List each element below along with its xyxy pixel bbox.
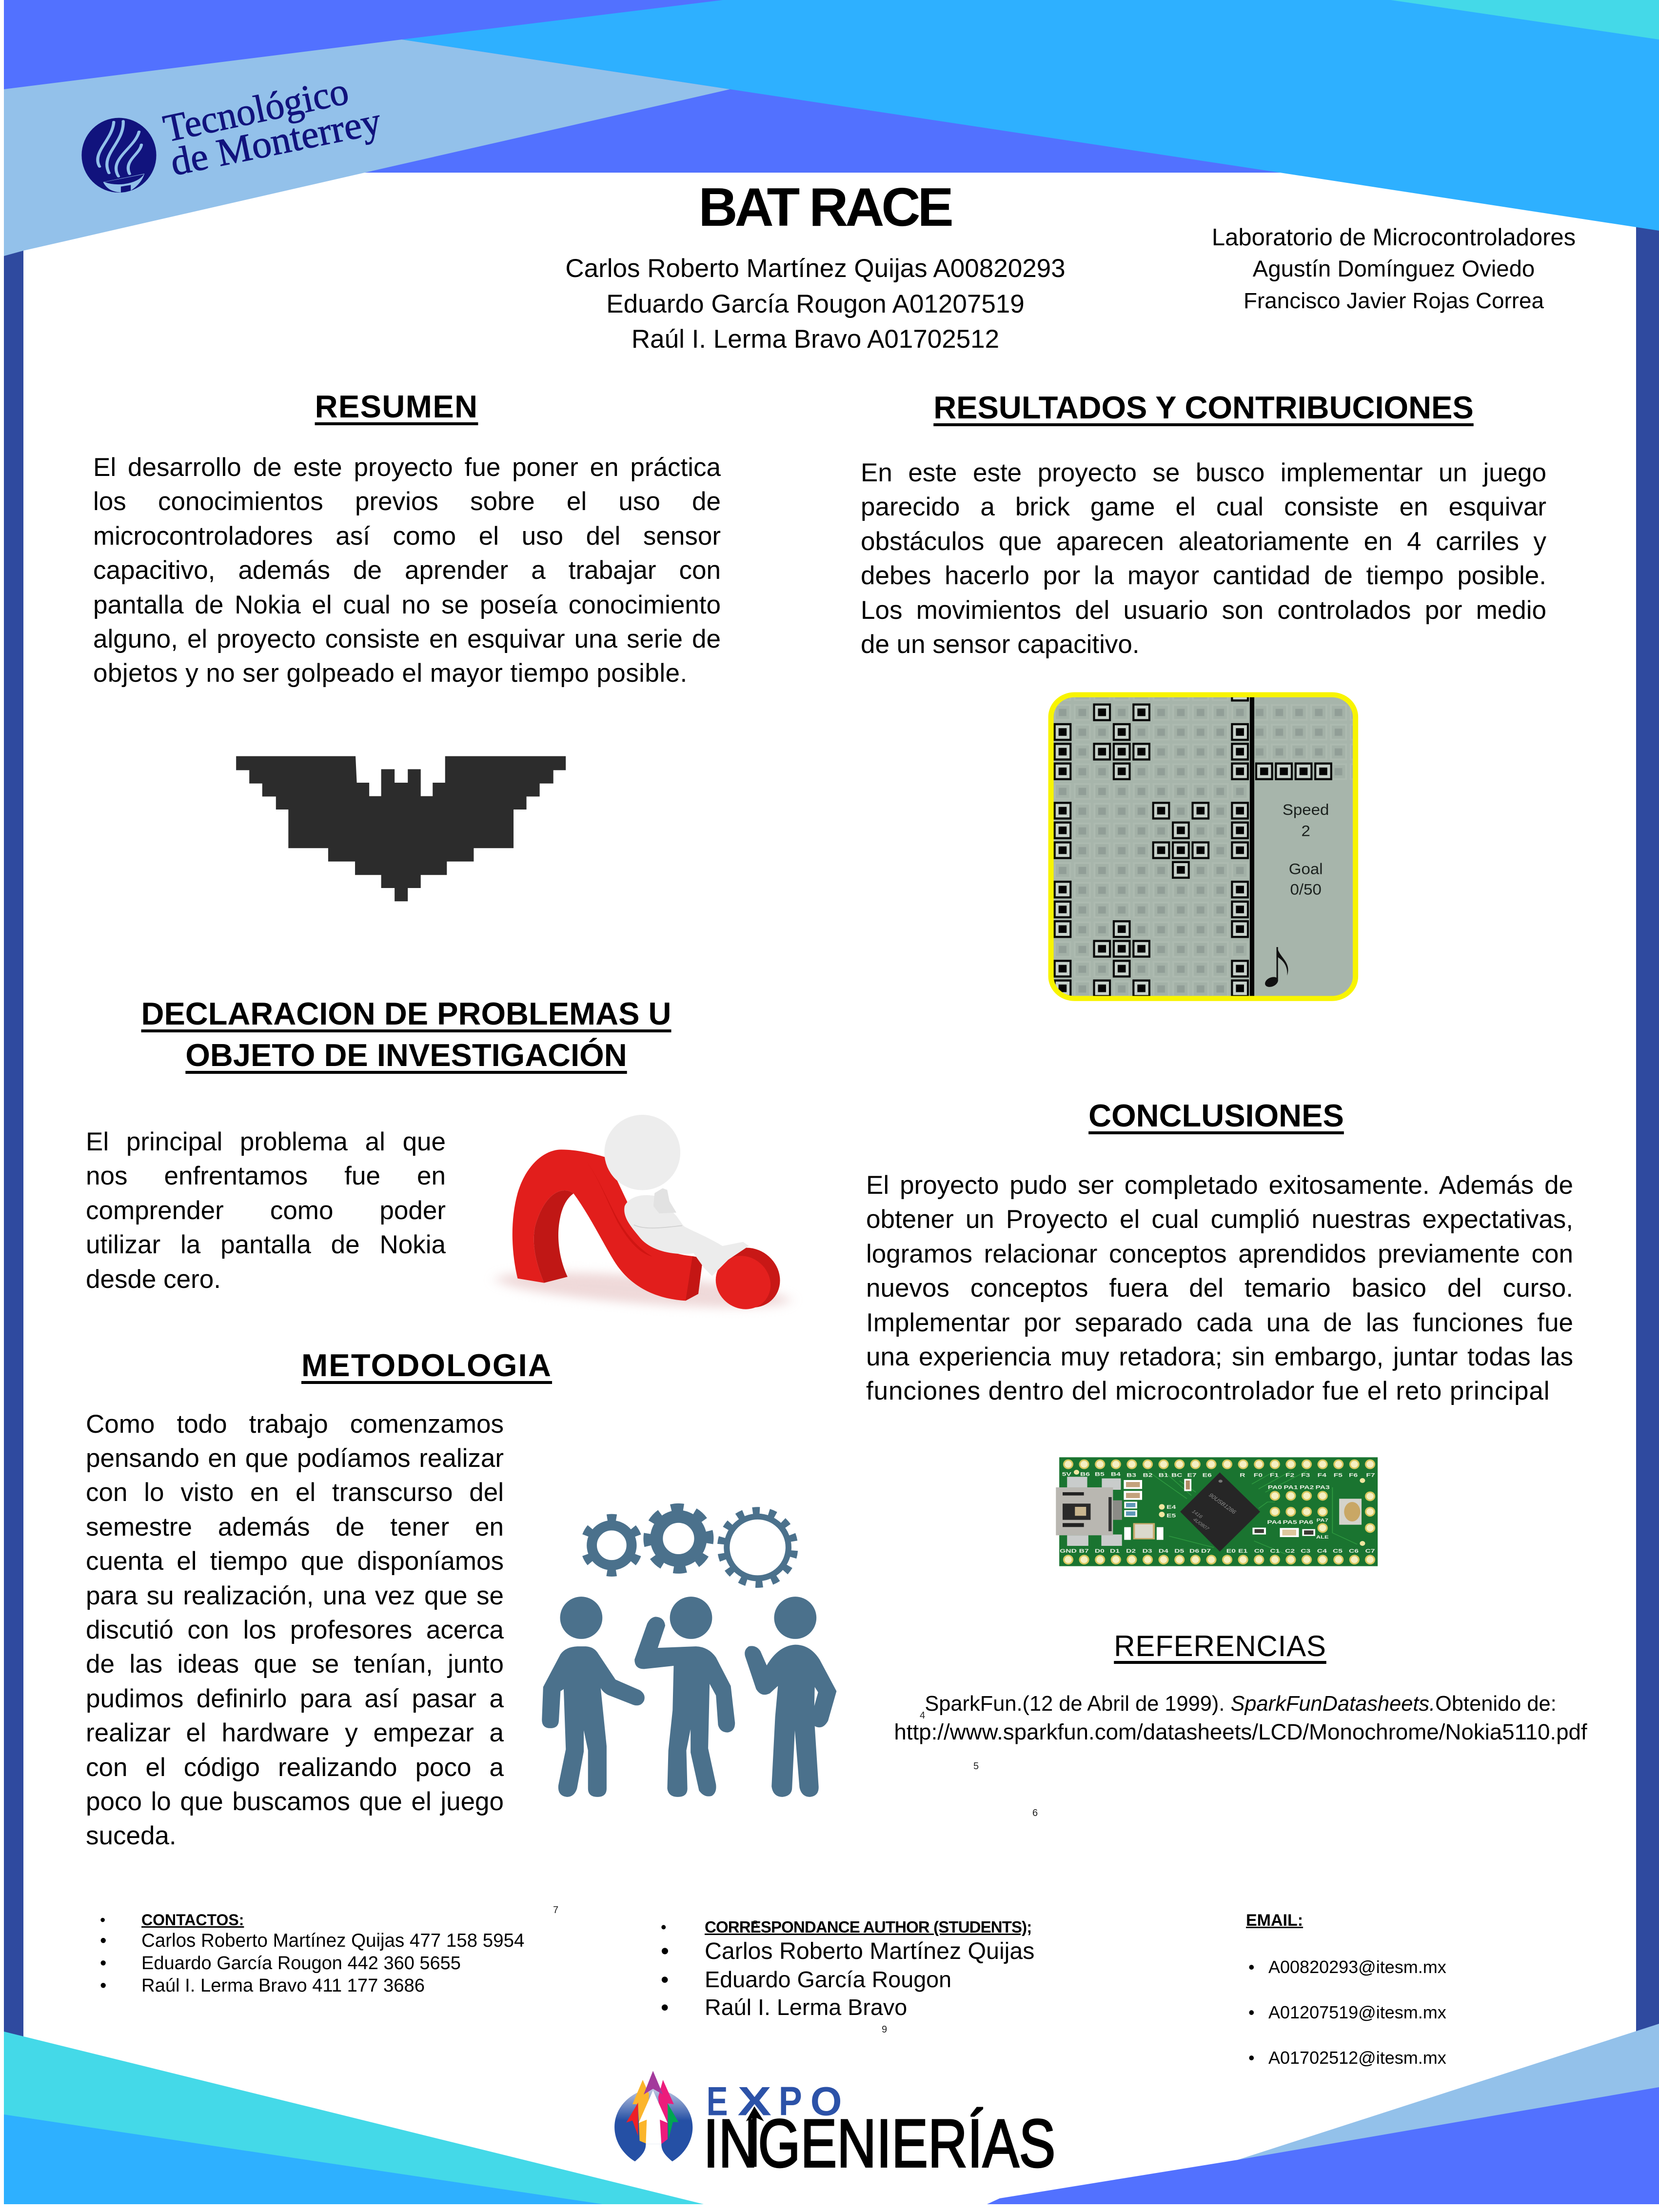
pin labels: PA3 [1316,1484,1330,1490]
correspondance author list: • [661,1967,669,1992]
pin labels: C7 [1365,1548,1375,1554]
pin labels: R [1240,1472,1245,1478]
background: bottom left shapes [4,2032,704,2204]
footnote marker 9: 9 [882,2024,887,2035]
text: EXPO [707,2078,842,2124]
icon: left person [542,1597,645,1797]
text: metodologia: suceda. [86,1821,177,1850]
contactos list [100,1911,524,1996]
figure head [604,1115,680,1190]
pin labels: E5 [1166,1513,1176,1519]
text: conclusiones: El proyecto pudo ser completado exitosamente. Además de [866,1171,1573,1200]
author: Eduardo: Eduardo García Rougon [705,1967,951,1992]
text: Tecnologico: Tecnológico [159,69,352,151]
text: speed and goal: Speed [1283,801,1329,818]
floor shadow [494,1265,791,1314]
email list: • [1248,2048,1255,2068]
board traces [1148,1471,1357,1554]
background: bottom right shapes [987,2024,1659,2204]
text: metodologia: poco lo que buscamos que el juego [86,1787,504,1816]
pin labels: BC [1171,1472,1183,1478]
text: speed and goal: 2 [1301,822,1310,839]
text: INGENIERÍAS [703,2106,1055,2181]
author: Raul: Raúl I. Lerma Bravo [705,1995,907,2020]
pin labels: F5 [1334,1472,1343,1478]
text: resumen [93,453,721,688]
text: metodologia: semestre además de tener en [86,1513,504,1541]
text: metodologia [86,1409,504,1850]
pin labels: D3 [1143,1548,1152,1554]
heading: declaracion de problemas [141,996,671,1074]
text: conclusiones: logramos relacionar conceptos aprendidos previamente con [866,1240,1573,1268]
icon: right person [745,1597,836,1797]
icon: pixel bat [236,756,566,901]
text: declaracion: desde cero. [86,1265,221,1294]
pin labels: PA4 [1267,1519,1282,1525]
footnote marker 8: 8 [752,1919,758,1930]
pin labels: F1 [1270,1472,1279,1478]
heading: conclusiones: CONCLUSIONES [1088,1098,1344,1133]
text: speed and goal [1283,801,1329,898]
pin labels: B2 [1143,1472,1153,1478]
email list: • [1248,1957,1255,1977]
course and professors [1212,224,1576,313]
game screenshot: brick game screen [1051,683,1357,1000]
pin labels: GND [1060,1548,1077,1554]
pin labels: B5 [1095,1471,1105,1477]
footnote marker 4: 4 [920,1710,925,1721]
text: metodologia: de las ideas que se tenían, junto [86,1650,504,1679]
pin labels: F4 [1318,1472,1326,1478]
correspondance author list: • [661,1995,669,2020]
pin labels: D0 [1095,1548,1105,1554]
pin labels: D7 [1201,1548,1211,1554]
pin labels [1060,1471,1375,1554]
figure body [624,1195,749,1276]
pin labels: PA5 [1283,1519,1297,1525]
pin labels: F7 [1366,1472,1375,1478]
small components [1124,1479,1362,1540]
icon: people and gears [542,1501,836,1797]
pin labels: F3 [1301,1472,1310,1478]
footnote marker 5: 5 [973,1761,979,1772]
text: resumen: objetos y no ser golpeado el mayor tiempo posible. [93,659,688,688]
text: conclusiones: Implementar por separado cada una de las funciones fue [866,1308,1573,1337]
pin labels: E6 [1203,1472,1212,1478]
text: declaracion: El principal problema al que [86,1127,446,1156]
contactos list: • [100,1953,106,1974]
pin labels: B4 [1111,1471,1121,1477]
text: metodologia: pensando en que podíamos realizar [86,1444,504,1473]
footnote marker 7: 7 [553,1905,558,1916]
heading: declaracion de problemas: OBJETO DE INVESTIGACIÓN [185,1037,627,1073]
text: metodologia: discutió con los profesores acerca [86,1616,504,1644]
chip: 4U0807 [1191,1518,1210,1531]
pin labels: B3 [1126,1472,1136,1478]
text: conclusiones: obtener un Proyecto el cual cumplió nuestras expectativas, [866,1205,1573,1234]
pin labels: B1 [1159,1472,1168,1478]
text: de Monterrey: de Monterrey [167,99,385,184]
text: declaracion: comprender como poder [86,1196,446,1225]
pads [1063,1460,1375,1564]
chip: 90USB1286 [1207,1492,1238,1515]
pin labels: E0 [1226,1548,1236,1554]
authors: Raúl I. Lerma Bravo A01702512 [632,325,999,354]
icon: music note [1263,947,1288,989]
text: metodologia: con el código realizando poco a [86,1753,504,1782]
text: conclusiones: una experiencia muy retadora; sin embargo, juntar todas las [866,1343,1573,1371]
text: resultados: de un sensor capacitivo. [861,630,1140,659]
text: EXPO: X [738,2079,771,2124]
contact: Eduardo: Eduardo García Rougon 442 360 5655 [141,1953,461,1974]
pin labels: C0 [1254,1548,1264,1554]
text: resultados: parecido a brick game el cual consiste en esquivar [861,493,1546,521]
email: A01207519: A01207519@itesm.mx [1268,2002,1446,2022]
pin labels: B6 [1080,1471,1090,1477]
heading: metodologia: METODOLOGIA [301,1347,552,1383]
text: referencias [894,1692,1587,1744]
logo: Tecnologico de Monterrey [81,69,385,193]
text: referencias: http://www.sparkfun.com/datasheets/LCD/Monochrome/Nokia5110.pdf [894,1719,1587,1744]
image: figure sitting on red question mark [494,1115,791,1314]
authors: Eduardo García Rougon A01207519 [606,290,1025,318]
pin labels: E7 [1187,1472,1197,1478]
email heading: EMAIL: [1246,1911,1303,1930]
text: metodologia: pudimos definirlo para así pasar a [86,1684,504,1713]
USB connector [1056,1477,1122,1546]
text: resumen: El desarrollo de este proyecto fue poner en práctica [93,453,721,482]
email list: • [1248,2002,1255,2022]
pin labels: C2 [1285,1548,1295,1554]
text: declaracion: nos enfrentamos fue en [86,1162,446,1190]
pin labels: D1 [1110,1548,1120,1554]
text: EXPO: O [810,2078,842,2124]
text: EXPO: E [707,2078,728,2124]
text: metodologia: cuenta el tiempo que disponíamos [86,1547,504,1576]
text: declaracion: utilizar la pantalla de Nokia [86,1230,446,1259]
heading: referencias: REFERENCIAS [1114,1630,1326,1662]
correspondance author list [661,1918,1034,2020]
correspondance heading: CORRESPONDANCE AUTHOR (STUDENTS); [705,1918,1031,1936]
text: speed and goal: 0/50 [1290,881,1322,898]
text: resumen: microcontroladores así como el uso del sensor [93,522,721,551]
contactos list: • [100,1930,106,1951]
title: BAT RACE [698,177,951,237]
pin labels: F2 [1285,1472,1295,1478]
pin labels: C1 [1270,1548,1280,1554]
text: resumen: pantalla de Nokia el cual no se poseía conocimiento [93,591,721,619]
email: A01702512: A01702512@itesm.mx [1268,2048,1446,2068]
course and professors: Francisco Javier Rojas Correa [1244,288,1544,313]
text: metodologia: realizar el hardware y empezar a [86,1718,504,1747]
pin labels: PA2 [1300,1484,1314,1490]
authors [565,254,1066,354]
pin labels: E1 [1238,1548,1248,1554]
authors: Carlos Roberto Martínez Quijas A00820293 [565,254,1066,283]
text: resultados: Los movimientos del usuario son controlados por medio [861,596,1546,625]
background: top banner [4,0,1659,256]
icon: gears [584,1501,798,1587]
pin labels: PA6 [1299,1519,1313,1525]
correspondance author list: • [661,1918,666,1936]
contactos heading: CONTACTOS: [141,1911,244,1929]
text: metodologia: con lo visto en el transcurso del [86,1478,504,1507]
text: declaracion [86,1127,446,1294]
text: conclusiones [866,1171,1573,1405]
icon: torch emblem [81,118,157,193]
pin labels: PA0 [1268,1484,1282,1490]
course and professors: Agustín Domínguez Oviedo [1253,256,1535,282]
pin labels: C4 [1317,1548,1327,1554]
contactos list: • [100,1911,105,1929]
icon: flame arrows [614,2071,692,2161]
course and professors: Laboratorio de Microcontroladores [1212,224,1576,251]
icon: middle person [634,1597,735,1797]
footnote marker 6: 6 [1032,1808,1038,1818]
ball [713,1245,785,1310]
text: resultados [861,458,1546,659]
text: resultados: debes hacerlo por la mayor cantidad de tiempo posible. [861,561,1546,590]
chip: 1416 [1190,1509,1204,1519]
pin labels: ALE [1316,1535,1329,1540]
text: resultados: En este este proyecto se busco implementar un juego [861,458,1546,487]
text: speed and goal: Goal [1289,860,1323,877]
contact: Carlos: Carlos Roberto Martínez Quijas 477 158 5954 [141,1930,524,1951]
pin labels: C6 [1349,1548,1359,1554]
text: resumen: capacitivo, además de aprender a trabajar con [93,556,721,585]
pin labels: B7 [1079,1548,1089,1554]
pin labels: D6 [1189,1548,1199,1554]
text: resumen: alguno, el proyecto consiste en esquivar una serie de [93,625,721,653]
text: referencias: SparkFun.(12 de Abril de 1999). SparkFunDatasheets.Obtenido de: [925,1692,1557,1716]
pin labels: PA1 [1284,1484,1298,1490]
text: metodologia: para su realización, una vez que se [86,1581,504,1610]
email list [1244,1909,1487,2070]
image: microcontroller board [1056,1457,1378,1566]
logo: Expo Ingenierias [614,2071,1055,2181]
heading: resumen: RESUMEN [315,389,478,424]
icon: arrow [746,2106,764,2167]
question mark [513,1149,703,1301]
game grid cells [1053,697,1342,996]
text: resultados: obstáculos que aparecen aleatoriamente en 4 carriles y [861,527,1546,556]
pin labels: F6 [1349,1472,1358,1478]
text: resumen: los conocimientos previos sobre el uso de [93,487,721,516]
pin labels: D5 [1174,1548,1185,1554]
pin labels: PA7 [1317,1518,1328,1523]
correspondance author list: • [661,1938,669,1964]
pin labels: D2 [1126,1548,1136,1554]
text: conclusiones: nuevos conceptos fuera del temario basico del curso. [866,1274,1573,1303]
pin labels: C5 [1333,1548,1343,1554]
text: conclusiones: funciones dentro del microcontrolador fue el reto principal [866,1377,1550,1405]
heading: resultados y contribuciones: RESULTADOS Y CONTRIBUCIONES [933,390,1474,425]
contact: Raul: Raúl I. Lerma Bravo 411 177 3686 [141,1975,425,1996]
chip [1180,1472,1260,1552]
email: A00820293: A00820293@itesm.mx [1268,1957,1446,1977]
contactos list: • [100,1975,106,1996]
pin labels: D4 [1159,1548,1168,1554]
pin labels: E4 [1166,1504,1176,1510]
author: Carlos: Carlos Roberto Martínez Quijas [705,1938,1034,1964]
pin labels: C3 [1301,1548,1311,1554]
pin labels: 5V [1062,1471,1071,1477]
pin labels: F0 [1254,1472,1263,1478]
heading: declaracion de problemas: DECLARACION DE PROBLEMAS U [141,996,671,1031]
text: metodologia: Como todo trabajo comenzamos [86,1409,504,1439]
text: EXPO: P [779,2078,802,2124]
